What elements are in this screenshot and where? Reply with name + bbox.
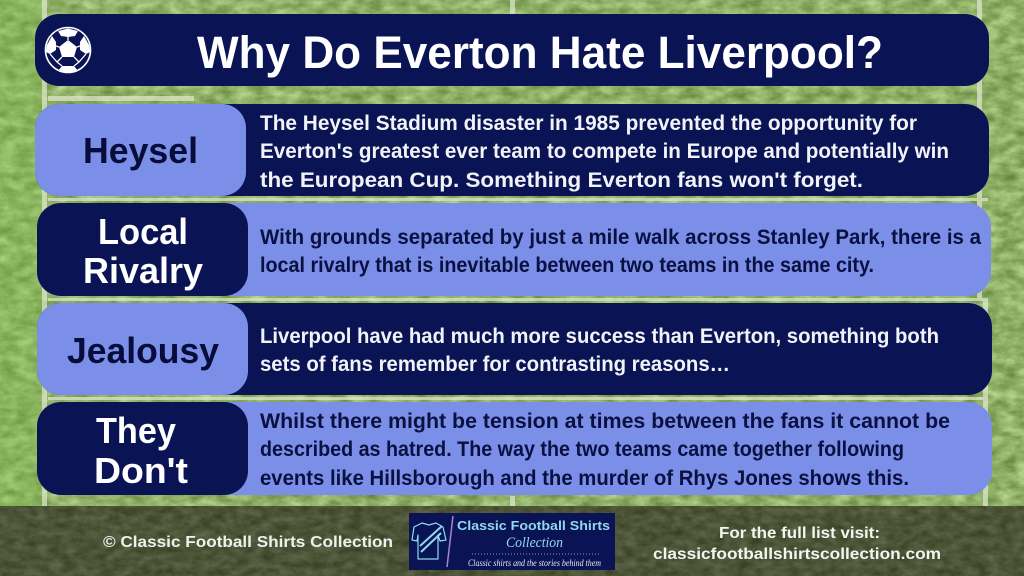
footer: website call to action bbox=[653, 525, 941, 563]
label: They Don't: They bbox=[96, 410, 176, 451]
text: Local Rivalry description bbox=[260, 226, 981, 277]
text: Jealousy description: Liverpool have had much more success than Everton, something both bbox=[260, 325, 939, 348]
label: They Don't bbox=[37, 402, 248, 495]
icon: shirt bbox=[412, 523, 446, 559]
panel: They Don't bbox=[37, 402, 992, 495]
icon: football bbox=[46, 28, 90, 72]
title banner bbox=[35, 14, 989, 86]
label: Heysel bbox=[35, 104, 246, 196]
text: Local Rivalry description: local rivalry that is inevitable between two teams in the same city. bbox=[260, 254, 874, 277]
label: Local Rivalry bbox=[37, 203, 248, 296]
logo: Classic Football Shirts Collection: Classic shirts and the stories behind them bbox=[468, 558, 601, 568]
text: Heysel description: Everton's greatest ever team to compete in Europe and potentially win bbox=[260, 140, 949, 163]
text: Jealousy description: sets of fans remember for contrasting reasons… bbox=[260, 353, 730, 376]
logo: Classic Football Shirts Collection bbox=[409, 513, 615, 570]
text: They Don't description bbox=[260, 410, 950, 490]
label: Heysel: Heysel bbox=[83, 130, 198, 171]
text: They Don't description: described as hatred. The way the two teams came together following bbox=[260, 438, 904, 461]
label: Local Rivalry: Rivalry bbox=[83, 250, 203, 291]
footer: website call to action: For the full list visit: bbox=[719, 525, 880, 542]
text: They Don't description: Whilst there might be tension at times between the fans it cannot be bbox=[260, 410, 950, 433]
label: Jealousy bbox=[37, 303, 248, 395]
footer band bbox=[0, 506, 1024, 576]
logo: Classic Football Shirts Collection: Classic Football Shirts bbox=[457, 518, 610, 533]
text: They Don't description: events like Hillsborough and the murder of Rhys Jones shows this. bbox=[260, 467, 909, 490]
text: Local Rivalry description: With grounds separated by just a mile walk across Stanley Park, there is a bbox=[260, 226, 981, 249]
label: Jealousy: Jealousy bbox=[67, 330, 219, 371]
footer: copyright: © Classic Football Shirts Collection bbox=[103, 534, 393, 551]
label: They Don't: Don't bbox=[94, 450, 188, 491]
panel: Jealousy bbox=[37, 303, 992, 395]
text: Jealousy description bbox=[260, 325, 939, 376]
text: Heysel description bbox=[260, 112, 949, 192]
text: Heysel description: The Heysel Stadium disaster in 1985 prevented the opportunity for bbox=[260, 112, 917, 135]
title text: Why Do Everton Hate Liverpool? bbox=[197, 27, 883, 78]
panel: Heysel bbox=[35, 104, 989, 196]
panel: Local Rivalry bbox=[37, 203, 991, 296]
text: Heysel description: the European Cup. Something Everton fans won't forget. bbox=[260, 169, 863, 192]
logo: Classic Football Shirts Collection: Collection bbox=[506, 535, 563, 551]
label: Local Rivalry: Local bbox=[98, 211, 188, 252]
footer: website call to action: classicfootballshirtscollection.com bbox=[653, 546, 941, 563]
